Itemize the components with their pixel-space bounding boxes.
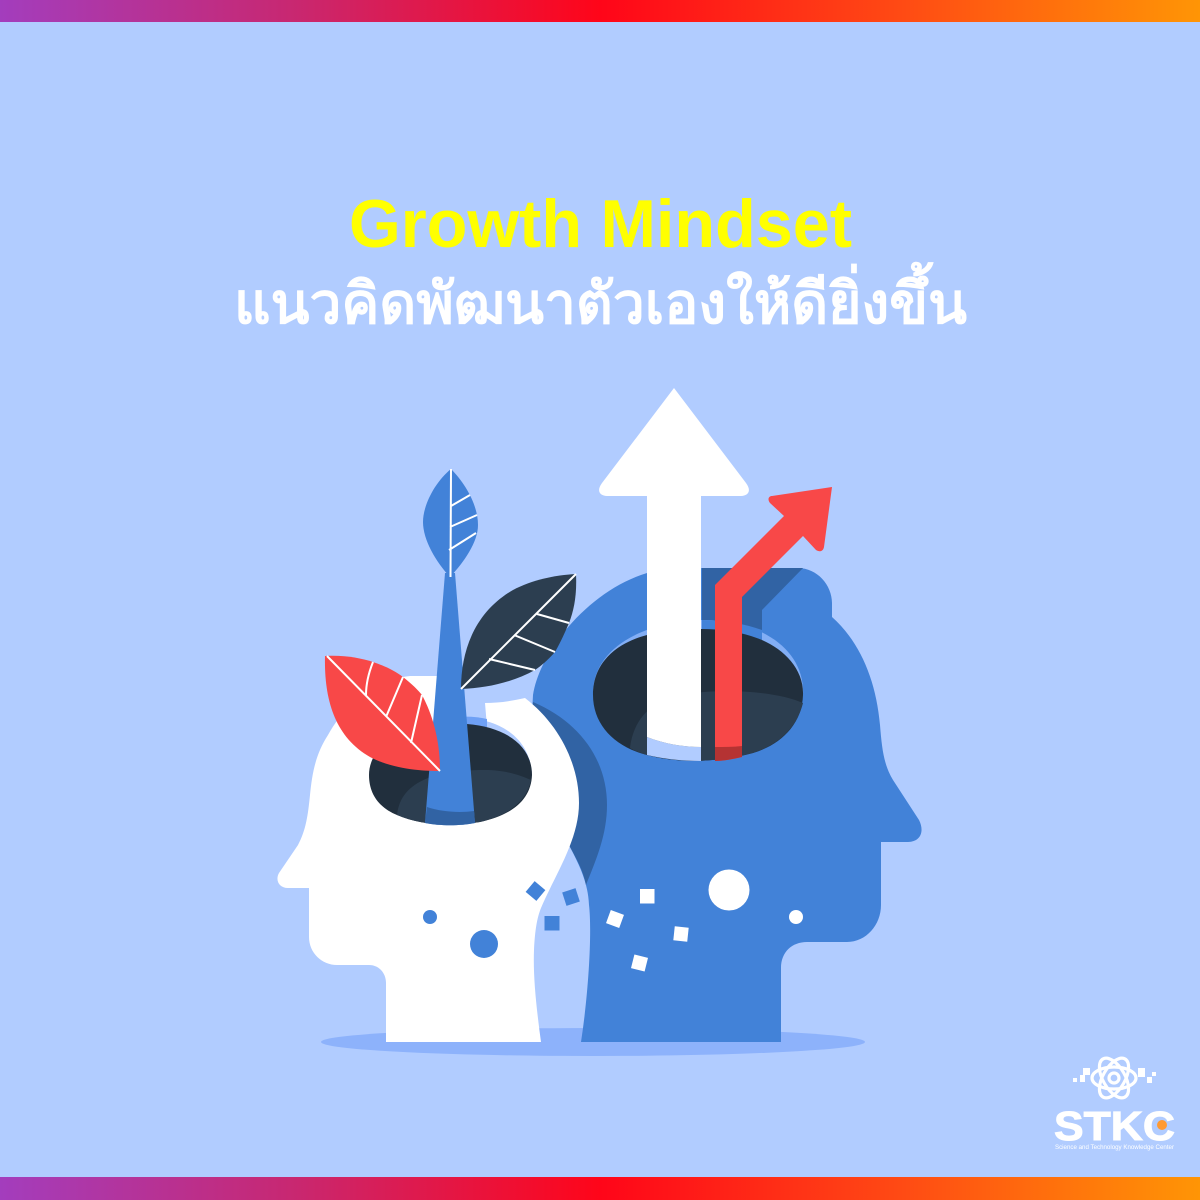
title: Growth Mindset (349, 186, 852, 262)
top gradient bar (0, 0, 1200, 22)
red arrow shadow (702, 568, 803, 640)
white arrow base (647, 737, 701, 761)
bottom gradient bar (0, 1177, 1200, 1200)
hole rim (593, 620, 803, 695)
stem base shade (425, 807, 475, 825)
blue head silhouette (530, 568, 922, 1042)
red leaf veins (327, 656, 440, 771)
white head silhouette (277, 676, 579, 1042)
logo: STKC (1054, 1053, 1175, 1151)
hole rim left part (457, 717, 487, 730)
logo pixel squares (1073, 1068, 1156, 1083)
hole rim (455, 718, 532, 775)
logo tagline: Science and Technology Knowledge Center (1055, 1145, 1174, 1151)
logo orange dot (1157, 1120, 1167, 1130)
hole rim centre (702, 620, 762, 640)
blue squares (526, 881, 580, 930)
red leaf (325, 656, 440, 771)
blue leaf blade (423, 469, 478, 577)
hole dark (593, 629, 803, 761)
red arrow base shade (715, 746, 742, 761)
ground shadow (321, 1028, 865, 1056)
white head (277, 573, 580, 1042)
blue leaf veins (449, 469, 477, 577)
logo wordmark: STKC (1054, 1103, 1175, 1149)
dark leaf veins (461, 574, 576, 689)
small white dot (789, 910, 803, 924)
hole dark (369, 724, 532, 825)
big white dot (708, 870, 750, 910)
blue leaf (423, 469, 478, 577)
logo icon: atom (1092, 1053, 1136, 1103)
red arrow (715, 487, 832, 761)
subtitle: แนวคิดพัฒนาตัวเองให้ดียิ่งขึ้น (234, 263, 967, 336)
dark leaf blade (461, 574, 576, 689)
white squares (606, 889, 689, 971)
illustration: two heads (277, 388, 922, 1056)
stem (425, 573, 475, 825)
hole lighter interior (630, 691, 803, 761)
shadow cast by white head (530, 702, 607, 885)
red leaf blade (325, 656, 440, 771)
hole lighter interior (397, 770, 531, 825)
white arrow (599, 388, 749, 747)
blue dots (423, 910, 498, 958)
dark leaf (461, 574, 576, 689)
blue head (530, 388, 922, 1042)
